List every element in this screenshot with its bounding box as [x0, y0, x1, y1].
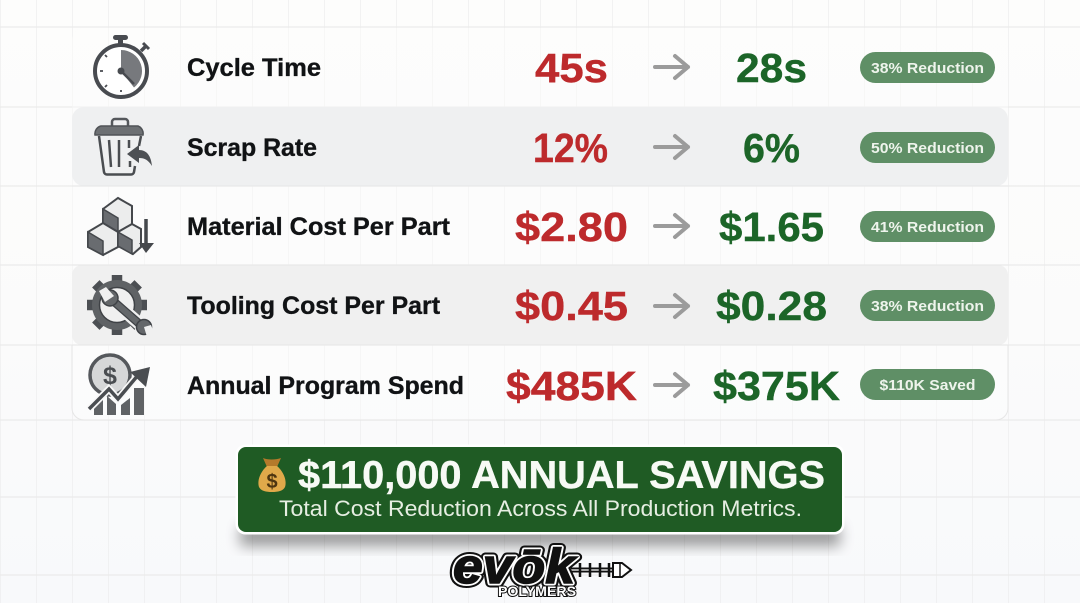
arrow — [655, 136, 688, 158]
pill: 38% reduction: 38% Reduction — [871, 298, 984, 315]
logo: evok polymers — [453, 540, 631, 599]
label: cycle time: Cycle Time — [187, 54, 321, 82]
logo: evok polymers: evōk — [453, 540, 578, 594]
label: tooling cost per part: Tooling Cost Per Part — [187, 292, 441, 320]
panel: metrics table — [72, 28, 1008, 420]
arrow — [655, 374, 688, 396]
old value: $2.80: $2.80 — [515, 204, 628, 250]
arrow — [655, 56, 688, 78]
logo: evok polymers: evōk — [453, 540, 578, 594]
pill: $110K saved: $110K Saved — [880, 377, 976, 394]
icon: stopwatch — [95, 35, 149, 97]
label: material cost per part: Material Cost Per Part — [187, 213, 451, 241]
pill: 50% reduction — [860, 132, 995, 163]
logo screw shaft — [571, 563, 631, 577]
new value: $0.28: $0.28 — [716, 283, 827, 329]
pill: 41% reduction — [860, 211, 995, 242]
pill: 38% reduction — [860, 290, 995, 321]
old value: 45s: 45s — [535, 45, 608, 91]
new value: $375K: $375K — [713, 363, 840, 409]
new value: $1.65: $1.65 — [719, 204, 824, 250]
icon: trash can with return arrow — [95, 119, 152, 175]
banner subtitle: Total Cost Reduction Across All Production Metrics. — [279, 496, 802, 521]
row: tooling cost per part — [87, 275, 995, 337]
row: annual program spend — [89, 355, 995, 415]
old value: 12%: 12% — [533, 125, 608, 171]
arrow — [655, 295, 688, 317]
label: scrap rate: Scrap Rate — [187, 134, 317, 162]
pill: $110K saved — [860, 369, 995, 400]
pill: 50% reduction: 50% Reduction — [871, 140, 984, 157]
old value: $485K: $485K — [506, 363, 637, 409]
icon: dollar coin with rising chart: $ — [103, 362, 117, 390]
row: scrap rate — [95, 119, 995, 175]
label: annual program spend: Annual Program Spend — [187, 372, 464, 400]
pill: 38% reduction — [860, 52, 995, 83]
icon: money bag — [258, 458, 286, 493]
banner title: $110,000 ANNUAL SAVINGS — [298, 454, 825, 497]
new value: 28s: 28s — [736, 45, 807, 91]
icon: cubes with down arrow — [88, 198, 154, 255]
icon: dollar coin with rising chart — [89, 355, 150, 415]
row: cycle time — [95, 35, 995, 97]
callout: annual savings banner — [236, 444, 844, 546]
new value: 6%: 6% — [743, 125, 800, 171]
logo: evok polymers: evōk — [453, 540, 578, 594]
icon: money bag: $ — [266, 471, 278, 493]
icon: gear with wrench — [87, 275, 154, 337]
logo: evok polymers: POLYMERS — [498, 583, 576, 599]
pill: 38% reduction: 38% Reduction — [871, 60, 984, 77]
pill: 41% reduction: 41% Reduction — [871, 219, 984, 236]
arrow — [655, 215, 688, 237]
old value: $0.45: $0.45 — [515, 283, 628, 329]
row: material cost per part — [88, 198, 995, 255]
